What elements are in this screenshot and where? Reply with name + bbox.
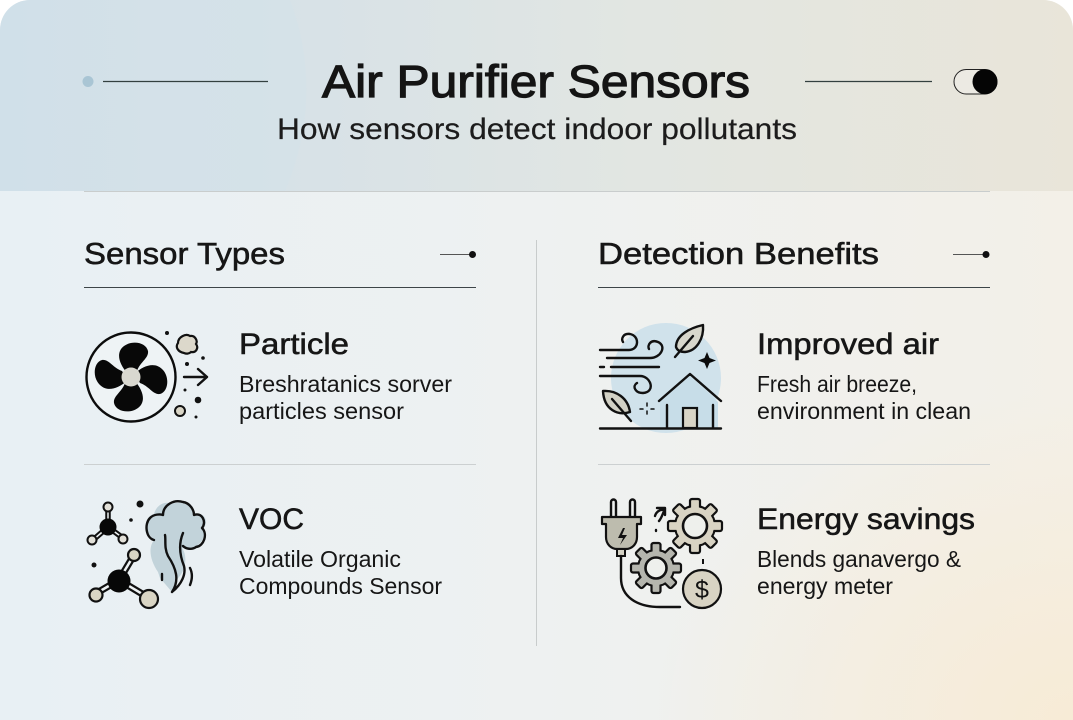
label: voc: VOC bbox=[239, 503, 304, 536]
text: energy savings description: Blends ganavergo & bbox=[757, 546, 961, 572]
text: voc description: Compounds Sensor bbox=[239, 573, 442, 599]
row divider bbox=[84, 464, 476, 465]
heading rule bbox=[598, 287, 990, 288]
text: energy savings description: energy meter bbox=[757, 573, 893, 599]
label: energy savings: Energy savings bbox=[757, 503, 975, 536]
heading ornament bbox=[953, 251, 990, 258]
right header ornament bbox=[805, 69, 998, 94]
arrow bbox=[655, 508, 665, 531]
title: Air Purifier Sensors bbox=[322, 56, 750, 107]
icon: plug, gears and coin bbox=[602, 499, 722, 608]
text: particle description: Breshratanics sorver bbox=[239, 371, 452, 397]
row divider bbox=[598, 464, 990, 465]
text: improved air description: Fresh air breeze, bbox=[757, 371, 917, 397]
center vertical divider bbox=[536, 240, 537, 646]
heading: detection benefits: Detection Benefits bbox=[598, 236, 879, 271]
text: particle description bbox=[239, 371, 452, 424]
label: particle: Particle bbox=[239, 328, 349, 361]
text: voc description: Volatile Organic bbox=[239, 546, 401, 572]
gear large bbox=[668, 499, 722, 553]
heading: sensor types: Sensor Types bbox=[84, 236, 285, 271]
gear small bbox=[631, 543, 681, 593]
text: voc description bbox=[239, 546, 442, 599]
text: improved air description bbox=[757, 371, 971, 424]
panel: sensor types bbox=[84, 236, 476, 608]
icon: molecules and smoke bbox=[88, 500, 206, 608]
header band bbox=[0, 0, 1073, 191]
subtitle: How sensors detect indoor pollutants bbox=[277, 113, 797, 146]
icon: fresh air and house bbox=[600, 323, 721, 433]
heading ornament bbox=[440, 251, 476, 258]
panel: detection benefits bbox=[598, 236, 990, 608]
label: improved air: Improved air bbox=[757, 328, 939, 361]
heading rule bbox=[84, 287, 476, 288]
header divider bbox=[84, 191, 990, 192]
text: improved air description: environment in clean bbox=[757, 398, 971, 424]
icon: fan with particles bbox=[86, 331, 207, 422]
text: particle description: particles sensor bbox=[239, 398, 404, 424]
text: energy savings description bbox=[757, 546, 961, 599]
left header ornament bbox=[82, 76, 268, 87]
dollar coin: $ bbox=[695, 576, 709, 604]
